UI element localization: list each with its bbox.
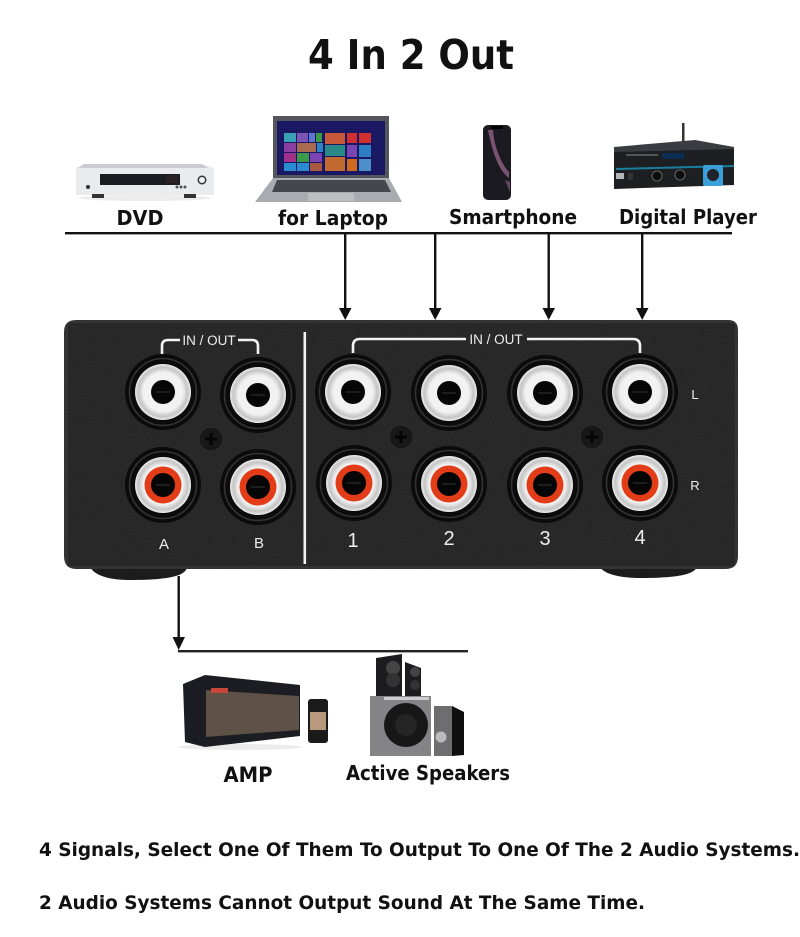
label: B: B — [254, 535, 264, 552]
icon: digital player amplifier — [614, 123, 734, 189]
arrow: input 3 — [542, 233, 555, 320]
icon: laptop — [255, 116, 402, 202]
label: AMP: AMP — [224, 763, 272, 787]
jack: 2 right — [411, 446, 487, 522]
icon: DVD player — [76, 164, 214, 201]
label: 2: 2 — [443, 528, 455, 550]
icon: amp — [178, 675, 328, 750]
label: Active Speakers: Active Speakers — [346, 761, 510, 785]
screw: center-right — [580, 425, 604, 449]
switch box panel — [64, 320, 738, 580]
label: R: R — [690, 478, 700, 493]
output bus line — [178, 650, 468, 652]
screw: left — [199, 427, 223, 451]
arrow: output — [172, 576, 185, 650]
note line 2: 2 Audio Systems Cannot Output Sound At The Same Time. — [39, 892, 645, 914]
jack: 3 right — [507, 447, 583, 523]
jack: B left — [220, 357, 296, 433]
label: 3: 3 — [539, 528, 551, 550]
jack: B right — [220, 449, 296, 525]
icon: smartphone — [483, 125, 511, 200]
bracket: 1-4 IN/OUT — [353, 332, 640, 353]
input bus line — [65, 232, 732, 234]
jack: 2 left — [411, 355, 487, 431]
label: L: L — [691, 387, 699, 402]
jack: 1 left — [315, 354, 391, 430]
label: DVD: DVD — [116, 206, 164, 230]
label: Digital Player: Digital Player — [619, 205, 757, 229]
jack: 4 right — [602, 445, 678, 521]
jack: 4 left — [602, 354, 678, 430]
screw: center-left — [389, 425, 413, 449]
jack: A left — [125, 354, 201, 430]
bracket: A B IN/OUT — [162, 333, 258, 354]
bracket: 1-4 IN/OUT: IN / OUT — [469, 332, 523, 347]
label: Smartphone: Smartphone — [449, 205, 577, 229]
arrow: input 1 — [339, 233, 352, 320]
jack: 1 right — [316, 445, 392, 521]
jack: 3 left — [507, 355, 583, 431]
label: 4: 4 — [634, 527, 646, 549]
jack: A right — [125, 447, 201, 523]
label: A: A — [159, 536, 169, 553]
label: for Laptop: for Laptop — [278, 206, 388, 230]
divider — [304, 332, 306, 564]
label: 1: 1 — [347, 530, 359, 552]
icon: active speakers — [370, 654, 464, 756]
title: 4 In 2 Out — [308, 31, 514, 79]
bracket: A B IN/OUT: IN / OUT — [182, 333, 236, 348]
note line 1: 4 Signals, Select One Of Them To Output To One Of The 2 Audio Systems. — [39, 839, 800, 861]
arrow: input 2 — [429, 233, 442, 320]
arrow: input 4 — [636, 233, 648, 320]
